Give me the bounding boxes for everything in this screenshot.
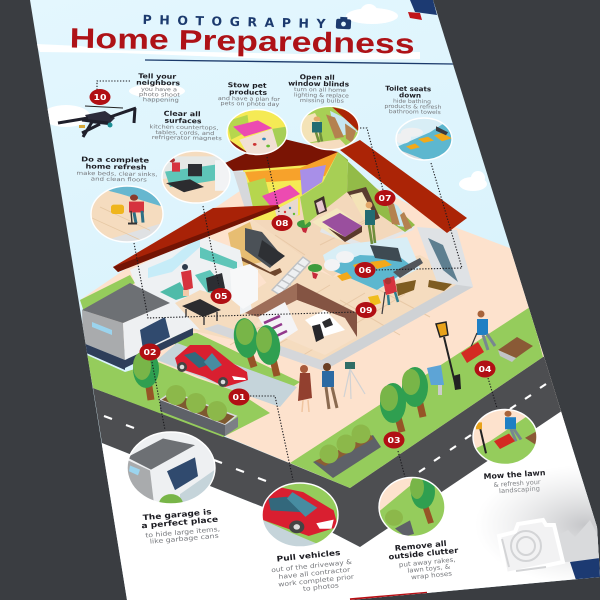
circle: blinds outline bbox=[301, 106, 359, 150]
label: garage: to hide large items, bbox=[145, 525, 220, 540]
label: mow the lawn: & refresh your bbox=[493, 478, 541, 489]
label: mow the lawn: landscaping bbox=[499, 484, 540, 495]
white lower area bbox=[102, 406, 600, 600]
vacuuming person bbox=[368, 276, 416, 314]
green bedroom bbox=[300, 152, 415, 242]
header accent blue bbox=[410, 0, 437, 15]
label: complete home refresh: home refresh bbox=[85, 162, 147, 172]
kitchen person bbox=[181, 264, 193, 296]
label: pull vehicles: Pull vehicles bbox=[276, 548, 341, 564]
circle: toilet bbox=[395, 118, 452, 160]
stairs bbox=[272, 257, 310, 295]
label: open all window blinds: turn on all home bbox=[294, 87, 347, 94]
car bbox=[175, 345, 248, 387]
label: pull vehicles: work complete prior bbox=[278, 573, 355, 589]
label: remove clutter: wrap hoses bbox=[411, 569, 453, 581]
label: remove clutter: outside clutter bbox=[388, 546, 459, 561]
badge 01: 01 bbox=[232, 393, 246, 402]
left planter bbox=[160, 385, 238, 436]
label: stow pet products: products bbox=[229, 88, 267, 97]
driveway bbox=[157, 343, 297, 407]
tv unit bbox=[241, 228, 285, 276]
trash bin bbox=[427, 365, 444, 395]
label: clear all surfaces: surfaces bbox=[165, 117, 202, 125]
badge 08 bbox=[272, 215, 292, 231]
plants bbox=[297, 220, 322, 279]
label: garage: a perfect place bbox=[141, 515, 219, 530]
badge 07 bbox=[374, 190, 396, 206]
right trees bbox=[380, 367, 428, 432]
badge 02 bbox=[140, 344, 160, 360]
kitchen bbox=[130, 235, 258, 330]
circle: pet outline bbox=[227, 110, 287, 154]
circle: car bbox=[262, 483, 338, 547]
floor stripes bbox=[230, 285, 430, 360]
right lawn bbox=[290, 307, 543, 488]
label: remove clutter bbox=[387, 538, 461, 583]
doormat bbox=[428, 280, 452, 291]
badge 02: 02 bbox=[144, 348, 156, 357]
badge 01 bbox=[228, 388, 250, 406]
circle: vacuum outline bbox=[91, 186, 163, 242]
bench bbox=[498, 337, 533, 362]
main title: Home Preparedness bbox=[69, 22, 415, 60]
bedroom person bbox=[365, 202, 375, 244]
badge 07: 07 bbox=[378, 194, 392, 203]
label: remove clutter: Remove all bbox=[394, 539, 447, 553]
circle: kitchen bbox=[162, 151, 230, 203]
label: garage: The garage is bbox=[142, 507, 212, 522]
badge 09: 09 bbox=[360, 306, 373, 315]
desk bbox=[305, 310, 345, 342]
label: toilet seats down: bathroom towels bbox=[389, 109, 441, 116]
label: clear all surfaces: tables, cords, and bbox=[155, 130, 214, 137]
stripe curtain wall bbox=[228, 222, 262, 268]
house structure bbox=[113, 138, 473, 372]
number badges bbox=[90, 89, 496, 448]
tripod camera bbox=[344, 362, 365, 399]
bottom red strip bbox=[350, 593, 427, 600]
dining table bbox=[182, 299, 221, 325]
badge 10: 10 bbox=[94, 93, 107, 102]
upper floor stripes bbox=[275, 213, 380, 255]
dotted leader lines bbox=[97, 81, 497, 480]
lower roof bbox=[113, 205, 277, 272]
label: tell your neighbors: Tell your bbox=[138, 72, 177, 81]
couple bbox=[298, 363, 337, 412]
header rule bbox=[145, 60, 453, 64]
bottom blue block bbox=[570, 558, 600, 583]
mountains bbox=[553, 520, 600, 562]
right roof bbox=[340, 140, 467, 233]
upper floor wood bbox=[253, 192, 412, 277]
living room wall bbox=[242, 220, 302, 282]
label: stow pet products bbox=[218, 81, 281, 108]
badge 06 bbox=[354, 262, 376, 278]
bottom right fade bbox=[475, 465, 600, 585]
label: stow pet products: pets on photo day bbox=[220, 101, 280, 108]
clouds bbox=[36, 4, 487, 191]
bookshelf bbox=[258, 302, 298, 345]
label: toilet seats down: down bbox=[399, 91, 421, 100]
badge 06: 06 bbox=[358, 266, 372, 275]
label: tell your neighbors bbox=[136, 72, 180, 104]
front walls bbox=[322, 282, 473, 366]
upper wall strip bbox=[320, 226, 415, 244]
label: open all window blinds bbox=[288, 73, 350, 105]
header accent red bbox=[408, 12, 422, 20]
lawn strip near house bbox=[172, 333, 300, 386]
label: mow the lawn: Mow the lawn bbox=[483, 468, 546, 481]
circle: mow bbox=[473, 409, 537, 465]
circle: clutter bbox=[379, 475, 445, 537]
label: garage: like garbage cans bbox=[149, 532, 220, 546]
label: open all window blinds: lighting & replace bbox=[294, 93, 350, 100]
left lawn bbox=[87, 355, 270, 437]
road markings bbox=[104, 384, 546, 481]
roads bbox=[93, 350, 575, 547]
badge 05: 05 bbox=[214, 292, 228, 301]
label: stow pet products: and have a plan for bbox=[218, 96, 281, 103]
house trees bbox=[231, 317, 283, 376]
label: remove clutter: put away rakes, bbox=[398, 556, 456, 569]
upper roof bbox=[225, 138, 338, 171]
badge 04 bbox=[474, 360, 496, 378]
label: remove clutter: lawn toys, & bbox=[407, 563, 451, 575]
label: tell your neighbors: you have a bbox=[141, 87, 177, 93]
label: complete home refresh: Do a complete bbox=[81, 155, 150, 165]
badge 05 bbox=[210, 288, 232, 304]
circle: car outline bbox=[262, 483, 338, 547]
lower roof shade bbox=[113, 205, 280, 272]
circle: kitchen outline bbox=[162, 151, 230, 203]
circle: mow outline bbox=[473, 410, 537, 464]
right planter bbox=[313, 424, 381, 478]
label: mow the lawn bbox=[483, 468, 547, 496]
label: toilet seats down: hide bathing bbox=[393, 99, 431, 105]
label: pull vehicles: to photos bbox=[303, 581, 340, 593]
label: clear all surfaces bbox=[149, 109, 222, 142]
badge 04: 04 bbox=[478, 365, 492, 374]
label: tell your neighbors: happening bbox=[143, 97, 179, 104]
lawn mower person bbox=[461, 310, 495, 363]
label: pull vehicles: have all contractor bbox=[278, 565, 351, 581]
camera watermark bbox=[499, 520, 563, 574]
label: pull vehicles: out of the driveway & bbox=[271, 558, 352, 574]
label: tell your neighbors: neighbors bbox=[136, 79, 180, 87]
label: pull vehicles bbox=[270, 547, 356, 596]
circle: window blinds bbox=[301, 106, 365, 150]
label: toilet seats down bbox=[384, 85, 442, 116]
circle: toilet outline bbox=[396, 118, 452, 160]
label: complete home refresh bbox=[76, 155, 158, 184]
tree near garage bbox=[133, 350, 159, 400]
camera icon bbox=[336, 17, 351, 29]
badge 10 bbox=[90, 89, 110, 105]
badge 08: 08 bbox=[276, 219, 289, 228]
label: open all window blinds: window blinds bbox=[288, 79, 349, 89]
right side wall bbox=[417, 227, 473, 287]
pale wall column bbox=[233, 171, 253, 206]
badge 03: 03 bbox=[388, 436, 400, 445]
bathroom bbox=[323, 237, 423, 290]
badge 09 bbox=[356, 302, 376, 318]
lower floor wood bbox=[190, 255, 470, 362]
label: open all window blinds: missing bulbs bbox=[300, 98, 344, 105]
circle: garage outline bbox=[127, 432, 215, 504]
upstairs pet room bbox=[243, 152, 338, 222]
label: tell your neighbors: photo shoot bbox=[139, 92, 180, 99]
label: stow pet products: Stow pet bbox=[228, 81, 267, 90]
drone bbox=[58, 106, 136, 137]
door bbox=[428, 238, 458, 282]
label: toilet seats down: products & refresh bbox=[384, 104, 441, 111]
sand ground bbox=[80, 166, 566, 488]
circle: garage bbox=[127, 432, 215, 514]
label: open all window blinds: Open all bbox=[300, 73, 335, 82]
label: garage bbox=[140, 507, 221, 546]
circle: vacuuming bbox=[90, 186, 164, 244]
label: complete home refresh: and clean floors bbox=[91, 177, 147, 184]
badge 03 bbox=[384, 432, 404, 448]
circle: clutter outline bbox=[379, 478, 445, 536]
garage bbox=[82, 283, 193, 370]
front wall left bbox=[204, 324, 326, 371]
back lawn bbox=[80, 275, 135, 312]
circle: pet room bbox=[227, 109, 287, 158]
label: toilet seats down: Toilet seats bbox=[385, 85, 431, 93]
title kicker: PHOTOGRAPHY bbox=[142, 12, 327, 31]
street lamp bbox=[436, 322, 461, 390]
label: clear all surfaces: Clear all bbox=[164, 110, 201, 118]
label: clear all surfaces: refrigerator magnets bbox=[152, 135, 222, 142]
label: complete home refresh: make beds, clear sinks, bbox=[76, 171, 158, 178]
label: clear all surfaces: kitchen countertops, bbox=[149, 124, 219, 132]
office room bbox=[245, 283, 357, 355]
